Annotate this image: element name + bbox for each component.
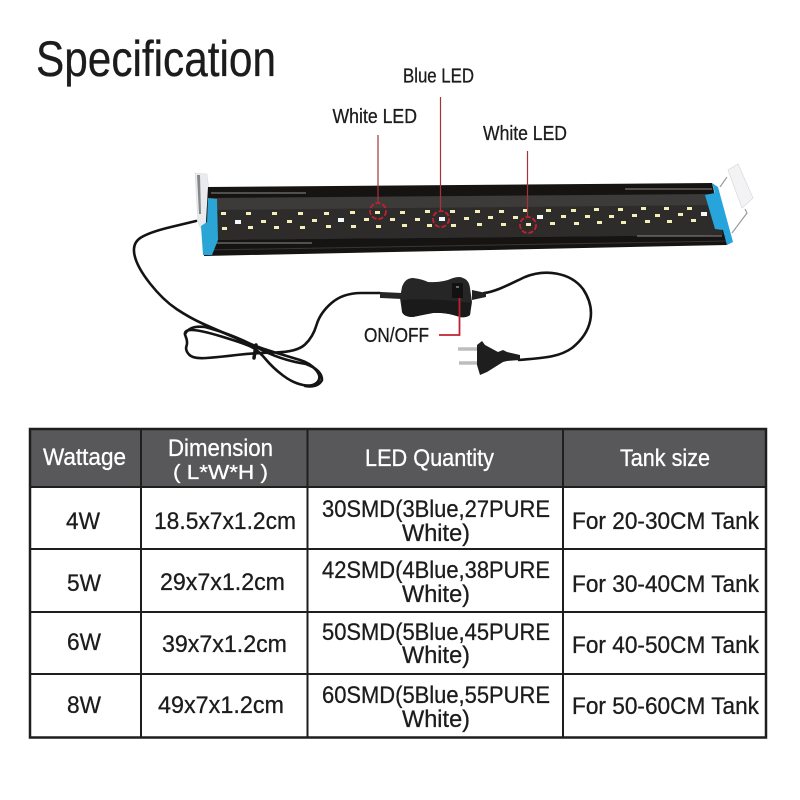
callout: white LED left (332, 106, 417, 219)
row: 6W: 39x7x1.2cm (162, 631, 287, 658)
row: 5W: 5W (67, 570, 101, 597)
table header: ( L*W*H ) (173, 462, 268, 484)
row: 8W: White) (402, 706, 470, 733)
callout: on/off (364, 298, 460, 347)
table header (30, 429, 766, 487)
callout: white LED right: White LED (483, 123, 567, 145)
row: 4W: White) (402, 520, 470, 547)
row: 4W: 18.5x7x1.2cm (154, 508, 296, 535)
power plug (458, 341, 520, 375)
row: 6W (67, 619, 760, 669)
left clip (195, 173, 212, 231)
callout: white LED left: White LED (332, 106, 417, 128)
LEDs (221, 207, 696, 230)
callout: white LED right (483, 123, 567, 233)
row: 4W: 4W (66, 508, 100, 535)
row: 6W: 50SMD(5Blue,45PURE (322, 619, 550, 646)
callout: blue LED (403, 66, 474, 227)
lamp body (204, 183, 727, 256)
table header: LED Quantity (365, 445, 494, 472)
table header: Dimension (168, 435, 273, 462)
row: 6W: For 40-50CM Tank (572, 632, 760, 659)
row: 8W (67, 682, 760, 733)
row: 5W: 42SMD(4Blue,38PURE (322, 557, 550, 584)
row: 6W: White) (402, 642, 470, 669)
row: 5W: White) (402, 581, 470, 608)
title: Specification (36, 31, 276, 87)
callout: on/off: ON/OFF (364, 325, 429, 347)
row: 8W: 60SMD(5Blue,55PURE (322, 682, 550, 709)
row: 5W: 29x7x1.2cm (160, 569, 285, 596)
row: 4W: 30SMD(3Blue,27PURE (322, 496, 550, 523)
right clip (720, 164, 753, 233)
row: 8W: 49x7x1.2cm (158, 692, 284, 719)
row: 8W: 8W (67, 692, 101, 719)
specification table (30, 429, 766, 738)
row: 8W: For 50-60CM Tank (572, 693, 760, 720)
row: 5W: For 30-40CM Tank (572, 571, 760, 598)
blue end caps (201, 198, 218, 255)
row: 6W: 6W (67, 629, 101, 656)
row: 4W: For 20-30CM Tank (572, 508, 760, 535)
LED lamp bar (195, 164, 753, 256)
power cord (134, 221, 591, 386)
row: 5W (67, 557, 760, 608)
table header: Tank size (620, 445, 710, 472)
on/off switch (380, 277, 486, 317)
table header: Wattage (43, 444, 126, 471)
callout: blue LED: Blue LED (403, 66, 474, 88)
row: 4W (66, 496, 760, 547)
blue LEDs (235, 212, 707, 224)
